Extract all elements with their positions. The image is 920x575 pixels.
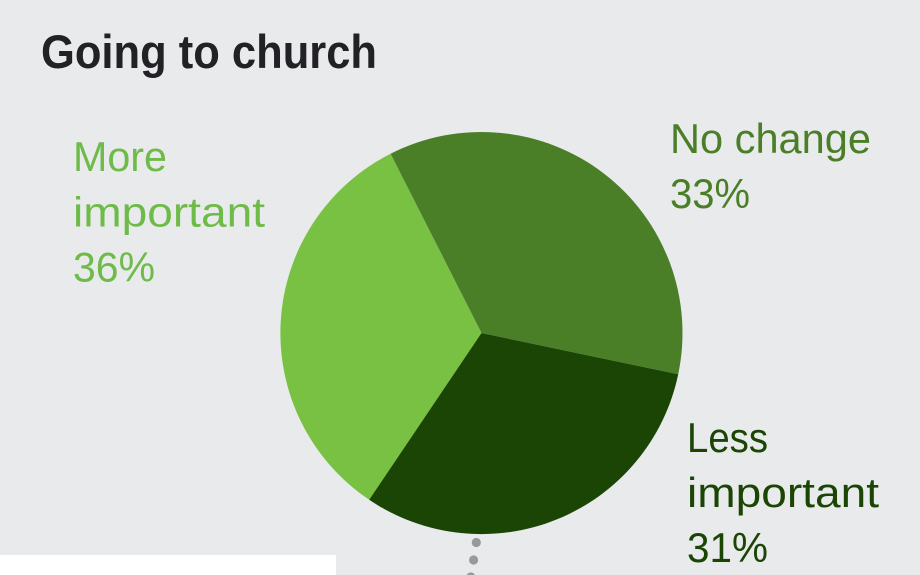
label: more important 36%: important — [73, 188, 265, 236]
slice: more important 36% — [280, 154, 482, 500]
slice: no change 33% — [391, 132, 682, 374]
dotted connector — [466, 538, 481, 575]
label: less important 31% — [687, 414, 879, 571]
pie chart — [280, 132, 682, 534]
label: less important 31%: 31% — [687, 524, 768, 571]
label: no change 33% — [670, 115, 871, 217]
label: less important 31%: important — [687, 469, 879, 516]
title: Going to church — [41, 25, 377, 78]
slice: less important 31% — [369, 333, 678, 534]
label: less important 31%: Less — [687, 414, 768, 461]
label: no change 33%: No change — [670, 115, 871, 162]
label: more important 36% — [73, 133, 265, 290]
white panel edge — [0, 555, 336, 575]
label: more important 36%: 36% — [73, 244, 155, 290]
label: more important 36%: More — [73, 133, 167, 180]
label: no change 33%: 33% — [670, 170, 750, 217]
